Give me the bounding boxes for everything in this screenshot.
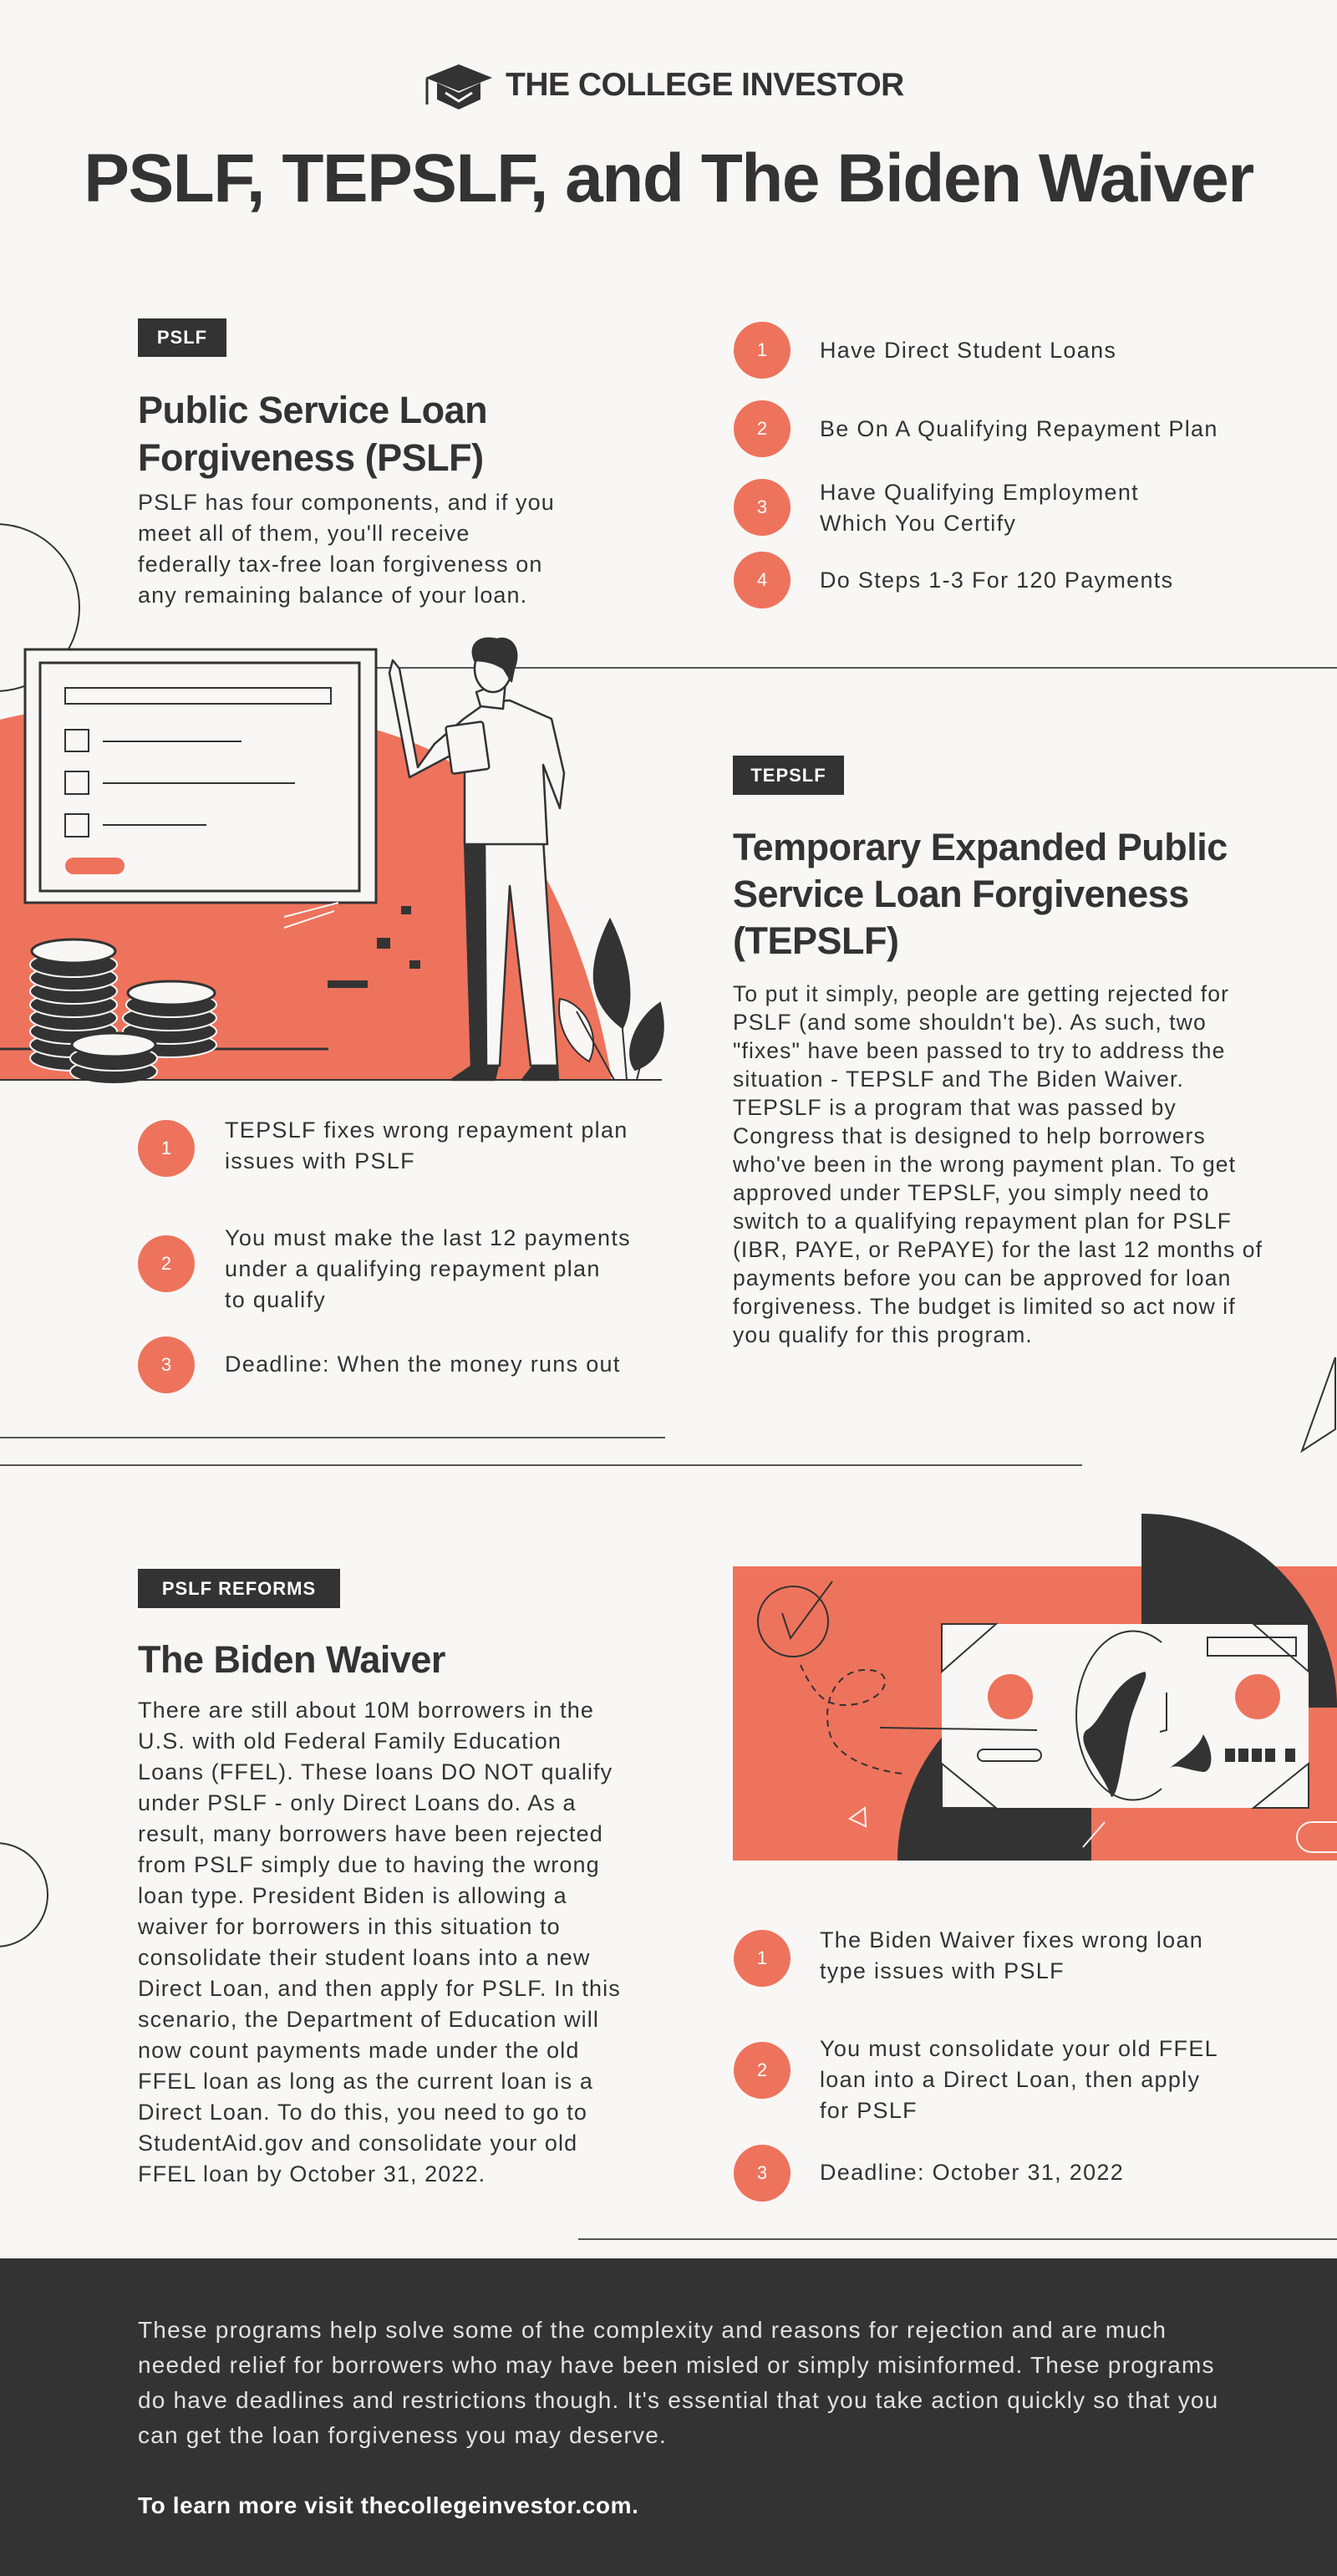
text: Biden Waiver description: FFEL loan as long as the current loan is a bbox=[138, 2069, 593, 2094]
text: TEPSLF description: Congress that is designed to help borrowers bbox=[733, 1123, 1206, 1148]
list: TEPSLF points bbox=[138, 1117, 631, 1393]
list: PSLF requirements bbox=[734, 322, 1218, 608]
text: PSLF description: meet all of them, you'll receive bbox=[138, 521, 470, 546]
item 1 bbox=[138, 1117, 628, 1177]
text: Biden Waiver description: now count payments made under the old bbox=[138, 2038, 580, 2063]
text: Biden Waiver description: Direct Loan, and then apply for PSLF. In this bbox=[138, 1976, 621, 2001]
text: Biden Waiver description: under PSLF - only Direct Loans do. As a bbox=[138, 1790, 577, 1815]
item 3 bbox=[138, 1336, 621, 1393]
item 2: 2 bbox=[757, 418, 767, 439]
text: TEPSLF description bbox=[733, 981, 1263, 1347]
text: TEPSLF description: To put it simply, people are getting rejected for bbox=[733, 981, 1229, 1006]
coins bbox=[30, 939, 216, 1084]
text: TEPSLF description: situation - TEPSLF and The Biden Waiver. bbox=[733, 1067, 1184, 1092]
footer bbox=[0, 2258, 1337, 2576]
text: Biden Waiver description: from PSLF simply due to having the wrong bbox=[138, 1852, 600, 1877]
item 3: 3 bbox=[161, 1354, 171, 1375]
text: PSLF description: federally tax-free loan forgiveness on bbox=[138, 552, 543, 577]
item 1: 1 bbox=[757, 1947, 767, 1968]
panel: PSLF bbox=[138, 318, 555, 608]
item 1: TEPSLF fixes wrong repayment plan bbox=[225, 1117, 628, 1143]
item 1 bbox=[734, 322, 1116, 379]
text: TEPSLF description: PSLF (and some shouldn't be). As such, two bbox=[733, 1010, 1207, 1035]
item 2: under a qualifying repayment plan bbox=[225, 1256, 601, 1281]
text: Biden Waiver description: There are still about 10M borrowers in the bbox=[138, 1698, 594, 1723]
text: TEPSLF description: switch to a qualifying repayment plan for PSLF bbox=[733, 1209, 1232, 1234]
item 2 bbox=[734, 400, 1218, 457]
item 3: 3 bbox=[757, 2162, 767, 2183]
text: Biden Waiver description: consolidate their student loans into a new bbox=[138, 1945, 591, 1970]
text: Biden Waiver description: FFEL loan by October 31, 2022. bbox=[138, 2161, 485, 2187]
item 2: Be On A Qualifying Repayment Plan bbox=[820, 416, 1218, 441]
item 1: Have Direct Student Loans bbox=[820, 338, 1116, 363]
item 4 bbox=[734, 552, 1173, 608]
checklist board bbox=[25, 649, 376, 903]
heading: PSLF: Public Service Loan bbox=[138, 389, 487, 431]
plant bbox=[559, 919, 663, 1080]
item 3: Have Qualifying Employment bbox=[820, 480, 1139, 505]
tag: TEPSLF bbox=[733, 756, 844, 795]
text: TEPSLF description: approved under TEPSLF, you simply need to bbox=[733, 1180, 1210, 1205]
text: TEPSLF description: (IBR, PAYE, or RePAYE) for the last 12 months of bbox=[733, 1237, 1263, 1262]
text: TEPSLF description: who've been in the wrong payment plan. To get bbox=[733, 1152, 1236, 1177]
item 3: Deadline: October 31, 2022 bbox=[820, 2160, 1124, 2185]
text: TEPSLF description: you qualify for this program. bbox=[733, 1322, 1033, 1347]
item 1: 1 bbox=[161, 1138, 171, 1158]
text: PSLF description: PSLF has four components, and if you bbox=[138, 490, 555, 515]
illustration: man with checklist and coins bbox=[0, 637, 664, 1083]
item 2: 2 bbox=[161, 1253, 171, 1274]
heading: TEPSLF: (TEPSLF) bbox=[733, 919, 898, 962]
panel: Biden Waiver bbox=[138, 1569, 621, 2187]
tag: TEPSLF: TEPSLF bbox=[750, 764, 826, 786]
list: Biden Waiver points: for PSLF bbox=[820, 2098, 918, 2123]
man bbox=[389, 639, 564, 1080]
text: Biden Waiver description: result, many borrowers have been rejected bbox=[138, 1821, 603, 1846]
item 2: 2 bbox=[757, 2059, 767, 2080]
item 1: 1 bbox=[757, 339, 767, 360]
footer text: can get the loan forgiveness you may deserve. bbox=[138, 2422, 667, 2448]
tag: PSLF REFORMS bbox=[138, 1569, 340, 1608]
text: TEPSLF description: TEPSLF is a program that was passed by bbox=[733, 1095, 1177, 1120]
logo bbox=[425, 64, 904, 109]
item 3 bbox=[734, 2145, 1124, 2202]
text: PSLF description: any remaining balance of your loan. bbox=[138, 583, 527, 608]
heading: TEPSLF: Service Loan Forgiveness bbox=[733, 873, 1189, 915]
icon: graduation cap bbox=[425, 64, 492, 109]
text: Biden Waiver description: scenario, the Department of Education will bbox=[138, 2007, 599, 2032]
text: Biden Waiver description: U.S. with old Federal Family Education bbox=[138, 1728, 562, 1754]
text: TEPSLF description: payments before you can be approved for loan bbox=[733, 1265, 1231, 1291]
footer text: These programs help solve some of the complexity and reasons for rejection and are much bbox=[138, 2317, 1167, 2343]
item 4: Do Steps 1-3 For 120 Payments bbox=[820, 568, 1173, 593]
text: Biden Waiver description: Loans (FFEL). These loans DO NOT qualify bbox=[138, 1759, 613, 1784]
item 4: 4 bbox=[757, 569, 767, 590]
text: Biden Waiver description: waiver for borrowers in this situation to bbox=[138, 1914, 561, 1939]
heading: The Biden Waiver: The Biden Waiver bbox=[138, 1638, 445, 1681]
item 3: 3 bbox=[757, 496, 767, 517]
item 1: type issues with PSLF bbox=[820, 1958, 1065, 1983]
item 2: loan into a Direct Loan, then apply bbox=[820, 2067, 1200, 2092]
item 3 bbox=[734, 479, 1139, 536]
logo text: THE COLLEGE INVESTOR bbox=[506, 67, 904, 103]
item 1 bbox=[734, 1927, 1203, 1987]
heading: PSLF: Forgiveness (PSLF) bbox=[138, 436, 484, 479]
illustration: dollar bill bbox=[733, 1514, 1337, 1861]
item 3: Which You Certify bbox=[820, 511, 1016, 536]
tag: PSLF: PSLF bbox=[157, 327, 207, 348]
item 2 bbox=[734, 2036, 1218, 2123]
tag: PSLF REFORMS: PSLF REFORMS bbox=[162, 1578, 316, 1598]
bill bbox=[942, 1624, 1309, 1808]
text: PSLF description bbox=[138, 490, 555, 608]
footer text: needed relief for borrowers who may have been misled or simply misinformed. These programs bbox=[138, 2352, 1215, 2378]
item 1: issues with PSLF bbox=[225, 1148, 415, 1173]
item 1: The Biden Waiver fixes wrong loan bbox=[820, 1927, 1203, 1952]
item 3: Deadline: When the money runs out bbox=[225, 1352, 621, 1377]
tag: PSLF bbox=[138, 318, 226, 357]
footer link: To learn more visit thecollegeinvestor.com. bbox=[138, 2492, 638, 2518]
heading: TEPSLF bbox=[733, 826, 1228, 962]
text: Biden Waiver description bbox=[138, 1698, 621, 2187]
text: TEPSLF description: forgiveness. The budget is limited so act now if bbox=[733, 1294, 1236, 1319]
footer text bbox=[138, 2317, 1218, 2448]
text: Biden Waiver description: loan type. President Biden is allowing a bbox=[138, 1883, 567, 1908]
item 2: You must make the last 12 payments bbox=[225, 1225, 631, 1250]
item 2: You must consolidate your old FFEL bbox=[820, 2036, 1218, 2061]
item 2 bbox=[138, 1225, 631, 1312]
list: TEPSLF points: to qualify bbox=[225, 1287, 326, 1312]
decorative circle outlines bbox=[0, 523, 80, 1947]
footer text: do have deadlines and restrictions though. It's essential that you take action quickly so that you bbox=[138, 2387, 1218, 2413]
text: Biden Waiver description: Direct Loan. To do this, you need to go to bbox=[138, 2100, 587, 2125]
divider lines bbox=[0, 667, 1337, 1466]
text: Biden Waiver description: StudentAid.gov and consolidate your old bbox=[138, 2131, 577, 2156]
list: Biden Waiver points bbox=[734, 1927, 1218, 2202]
text: TEPSLF description: "fixes" have been passed to try to address the bbox=[733, 1038, 1225, 1063]
heading: TEPSLF: Temporary Expanded Public bbox=[733, 826, 1228, 868]
title: PSLF, TEPSLF, and The Biden Waiver bbox=[84, 140, 1253, 216]
panel: TEPSLF bbox=[733, 756, 1263, 1347]
heading: PSLF bbox=[138, 389, 487, 479]
